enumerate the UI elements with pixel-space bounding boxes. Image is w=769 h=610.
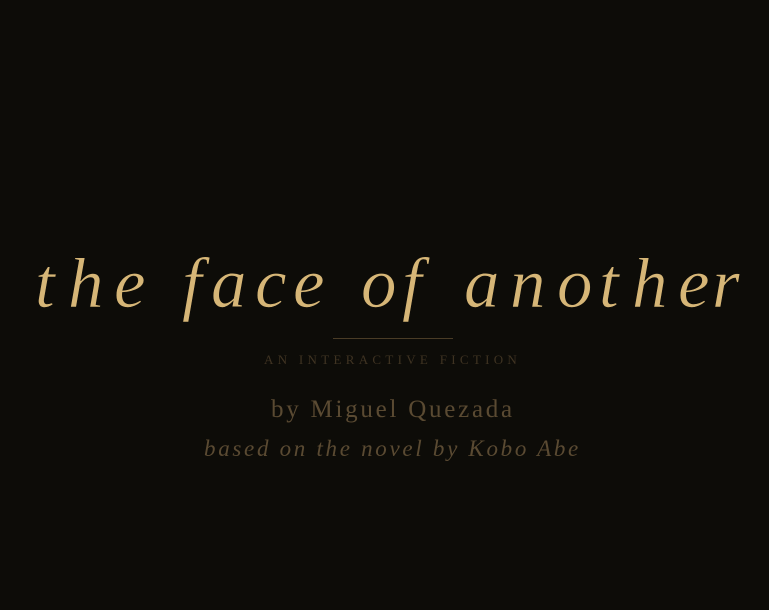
author line: by Miguel Quezada xyxy=(271,396,515,423)
subtitle: AN INTERACTIVE FICTION xyxy=(264,352,521,367)
source novel line: based on the novel by Kobo Abe xyxy=(204,436,581,461)
divider rule xyxy=(333,338,453,339)
title: the face of another xyxy=(0,245,740,323)
